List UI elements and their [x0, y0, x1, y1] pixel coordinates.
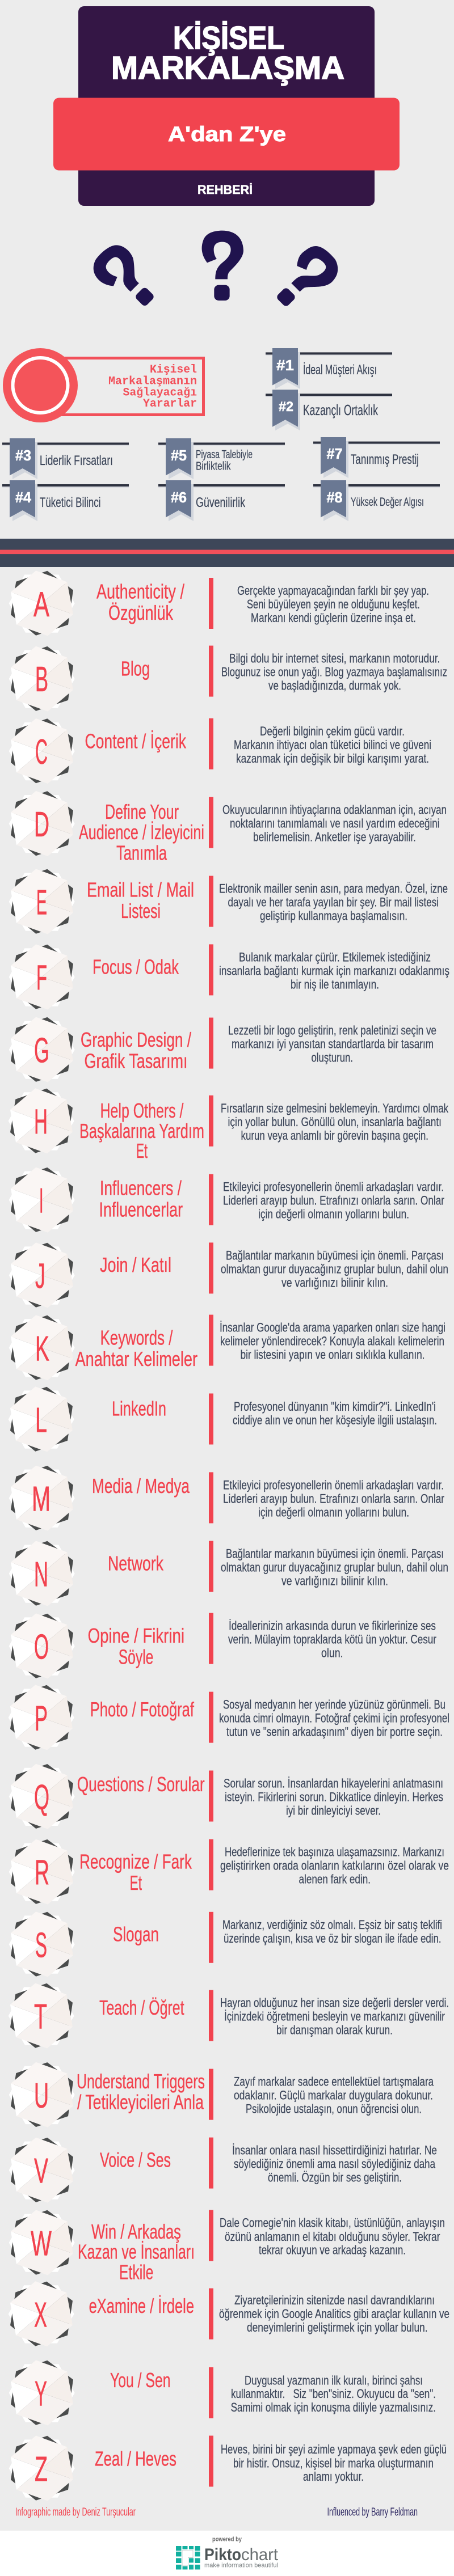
dark title card: [78, 6, 375, 206]
title panel: [53, 6, 400, 206]
row H: Et: [136, 1139, 148, 1162]
benefit 2: [266, 390, 392, 430]
row I: I: [39, 1182, 43, 1221]
row J: [9, 1242, 448, 1308]
row G: Graphic Design /: [81, 1028, 191, 1051]
row O: Söyle: [119, 1646, 153, 1669]
credit: author: Infographic made by Deniz Turşucular: [15, 2506, 136, 2519]
row W: tekrar okuyun ve arkadaş kazanın.: [259, 2243, 406, 2257]
row M: [9, 1466, 444, 1531]
row L: LinkedIn: [112, 1397, 166, 1420]
benefit 4: #4: [15, 489, 32, 506]
icon: left question mark: [94, 245, 155, 307]
row D: Tanımla: [116, 841, 167, 864]
row S: Slogan: [113, 1923, 159, 1946]
heading frame: [57, 358, 203, 415]
panel: benefits heading: [3, 348, 203, 422]
row W: W: [31, 2224, 52, 2264]
row Z: [9, 2436, 447, 2501]
row G: Grafik Tasarımı: [84, 1050, 187, 1073]
row M: M: [32, 1480, 51, 1519]
row H: H: [34, 1102, 48, 1141]
row R: Et: [130, 1871, 142, 1894]
row X: [9, 2281, 449, 2346]
row D: belirlemelisin. Anketler işe yarayabilir.: [253, 830, 416, 844]
wordmark: chart: [241, 2545, 279, 2564]
row O: Opine / Fikrini: [88, 1624, 184, 1647]
row A: Özgünlük: [108, 601, 174, 624]
row V: Voice / Ses: [100, 2148, 171, 2171]
row W: Win / Arkadaş: [91, 2220, 181, 2243]
row G: oluşturun.: [311, 1051, 353, 1065]
row P: Photo / Fotoğraf: [90, 1698, 195, 1721]
row U: / Tetikleyicileri Anla: [77, 2091, 204, 2114]
row T: T: [34, 1997, 47, 2037]
benefit 1: [266, 348, 392, 389]
row E: Email List / Mail: [87, 878, 194, 901]
subtitle: A'dan Z'ye: [168, 122, 286, 146]
row D: [9, 791, 447, 864]
row T: [9, 1983, 449, 2048]
icon: three question marks: [94, 231, 338, 307]
row Q: Questions / Sorular: [77, 1773, 205, 1796]
benefit 6: Güvenilirlik: [196, 495, 246, 510]
row I: için değerli olmanın yollarını bulun.: [258, 1207, 409, 1221]
benefit 3: Liderlik Fırsatları: [40, 453, 113, 468]
row B: ve başladığınızda, durmak yok.: [268, 679, 401, 693]
row N: N: [34, 1555, 48, 1594]
row B: [9, 646, 447, 712]
row Z: Zeal / Heves: [95, 2447, 176, 2470]
benefit 2: Kazançlı Ortaklık: [303, 401, 379, 418]
benefit 1: #1: [276, 357, 294, 374]
benefit 8: #8: [327, 489, 343, 506]
row F: F: [36, 958, 47, 997]
row X: X: [34, 2295, 47, 2334]
row L: [9, 1386, 437, 1452]
row C: Content / İçerik: [85, 729, 187, 752]
title: Kişisel Markalaşma: KİŞİSEL: [173, 20, 284, 56]
row N: [9, 1541, 448, 1606]
icon: piktochart grid: [176, 2546, 200, 2570]
row K: K: [35, 1329, 49, 1368]
tagline: make information beautiful: [204, 2562, 278, 2569]
row C: C: [35, 733, 48, 772]
row W: [9, 2210, 445, 2283]
row D: Define Your: [105, 800, 179, 823]
heading text: Kişisel: [150, 363, 197, 377]
row E: [9, 869, 448, 934]
heading circle: [3, 348, 78, 422]
row V: [9, 2138, 437, 2203]
row Y: You / Sen: [110, 2368, 170, 2392]
row C: Değerli bilginin çekim gücü vardır.: [260, 724, 405, 738]
icon: right question mark: [276, 246, 338, 307]
benefit 3: #3: [15, 447, 31, 464]
benefit 4: [2, 480, 129, 521]
row F: [9, 944, 449, 1009]
row F: Focus / Odak: [93, 955, 179, 979]
row T: Teach / Öğret: [99, 1996, 184, 2019]
row S: S: [35, 1926, 47, 1965]
row Z: Z: [35, 2450, 48, 2489]
benefit 5: [158, 438, 285, 479]
benefit 5: Piyasa Talebiyle: [196, 449, 253, 461]
row R: alenen fark edin.: [299, 1872, 371, 1886]
row Q: Q: [34, 1778, 49, 1817]
row B: B: [35, 660, 48, 699]
row K: Anahtar Kelimeler: [75, 1347, 197, 1371]
row M: için değerli olmanın yollarını bulun.: [258, 1505, 409, 1519]
heading text: Markalaşmanın: [108, 375, 197, 388]
section divider band: [0, 539, 454, 567]
title: Kişisel Markalaşma: MARKALAŞMA: [111, 50, 344, 86]
row H: [9, 1088, 449, 1162]
red subtitle band: [53, 98, 400, 170]
benefit 7: Tanınmış Prestij: [351, 452, 419, 467]
row B: Blog: [121, 657, 150, 680]
row O: [9, 1613, 436, 1678]
row R: [9, 1839, 449, 1905]
row W: Kazan ve İnsanları: [78, 2240, 195, 2264]
row Y: [9, 2360, 436, 2425]
row E: Listesi: [121, 899, 161, 923]
row K: [9, 1315, 445, 1380]
benefit 8: [313, 480, 440, 521]
heading text: Yararlar: [143, 397, 197, 411]
row V: önemli. Özgün bir ses geliştirin.: [268, 2171, 402, 2185]
row G: G: [34, 1031, 49, 1071]
heading text: Sağlayacağı: [123, 387, 197, 399]
piktochart footer logo: [176, 2536, 279, 2570]
row T: bir danışman olarak kurun.: [276, 2023, 393, 2037]
row N: Network: [108, 1551, 164, 1575]
row P: [9, 1685, 449, 1750]
benefit 3: [2, 438, 129, 479]
row U: [9, 2062, 434, 2127]
row Z: anlamı yoktur.: [303, 2469, 364, 2484]
row U: Understand Triggers: [77, 2070, 205, 2093]
row P: P: [35, 1699, 48, 1738]
row D: D: [34, 805, 49, 844]
row K: Keywords /: [100, 1326, 173, 1349]
powered by label: powered by: [212, 2536, 242, 2543]
benefit 5: Birliktelik: [196, 460, 231, 473]
benefit 6: #6: [171, 489, 187, 506]
wordmark: [204, 2545, 279, 2564]
row V: V: [34, 2152, 48, 2191]
benefit 6: [158, 480, 285, 521]
title: Kişisel Markalaşma: [111, 20, 344, 86]
row E: E: [36, 883, 47, 922]
row H: Başkalarına Yardım: [79, 1119, 204, 1143]
footer white strip: [0, 2531, 454, 2576]
row J: ve varlığınızı bilinir kılın.: [281, 1275, 388, 1289]
benefit 7: #7: [327, 445, 343, 462]
row M: Media / Medya: [92, 1474, 190, 1498]
row O: olun.: [321, 1646, 343, 1660]
row A: Authenticity /: [96, 580, 184, 603]
row H: Help Others /: [100, 1099, 184, 1122]
row O: O: [34, 1627, 49, 1666]
row Y: Y: [35, 2374, 47, 2413]
row S: [9, 1911, 442, 1977]
row J: Join / Katıl: [100, 1253, 171, 1276]
row A: [9, 570, 429, 636]
row F: bir niş ile tanımlayın.: [291, 977, 379, 991]
row R: R: [35, 1854, 49, 1893]
row R: Recognize / Fark: [79, 1850, 192, 1873]
heading text: [108, 363, 197, 411]
row I: Influencerlar: [99, 1198, 183, 1221]
row A: A: [33, 585, 49, 624]
benefit 5: #5: [171, 447, 187, 464]
row J: J: [35, 1257, 45, 1296]
row W: Etkile: [119, 2260, 153, 2283]
row G: [9, 1017, 436, 1082]
row Q: iyi bir dinleyiciyi sever.: [286, 1803, 381, 1818]
row X: eXamine / İrdele: [89, 2294, 194, 2317]
rehberi label: REHBERİ: [197, 183, 253, 197]
row E: geliştirip kullanmaya başlamalısın.: [260, 909, 407, 923]
row C: [9, 718, 431, 784]
row Q: [9, 1764, 443, 1829]
row I: [9, 1168, 444, 1233]
icon: center question mark: [202, 231, 243, 301]
row N: ve varlığınızı bilinir kılın.: [281, 1574, 388, 1588]
row D: Audience / İzleyicini: [79, 820, 204, 844]
row I: Influencers /: [100, 1176, 182, 1200]
benefit 1: İdeal Müşteri Akışı: [303, 362, 377, 378]
wordmark: Pikto: [204, 2545, 241, 2564]
row U: U: [34, 2076, 49, 2116]
benefit 2: #2: [279, 399, 293, 414]
benefit 4: Tüketici Bilinci: [40, 495, 101, 510]
row L: L: [35, 1401, 47, 1440]
benefit 7: [313, 437, 440, 478]
